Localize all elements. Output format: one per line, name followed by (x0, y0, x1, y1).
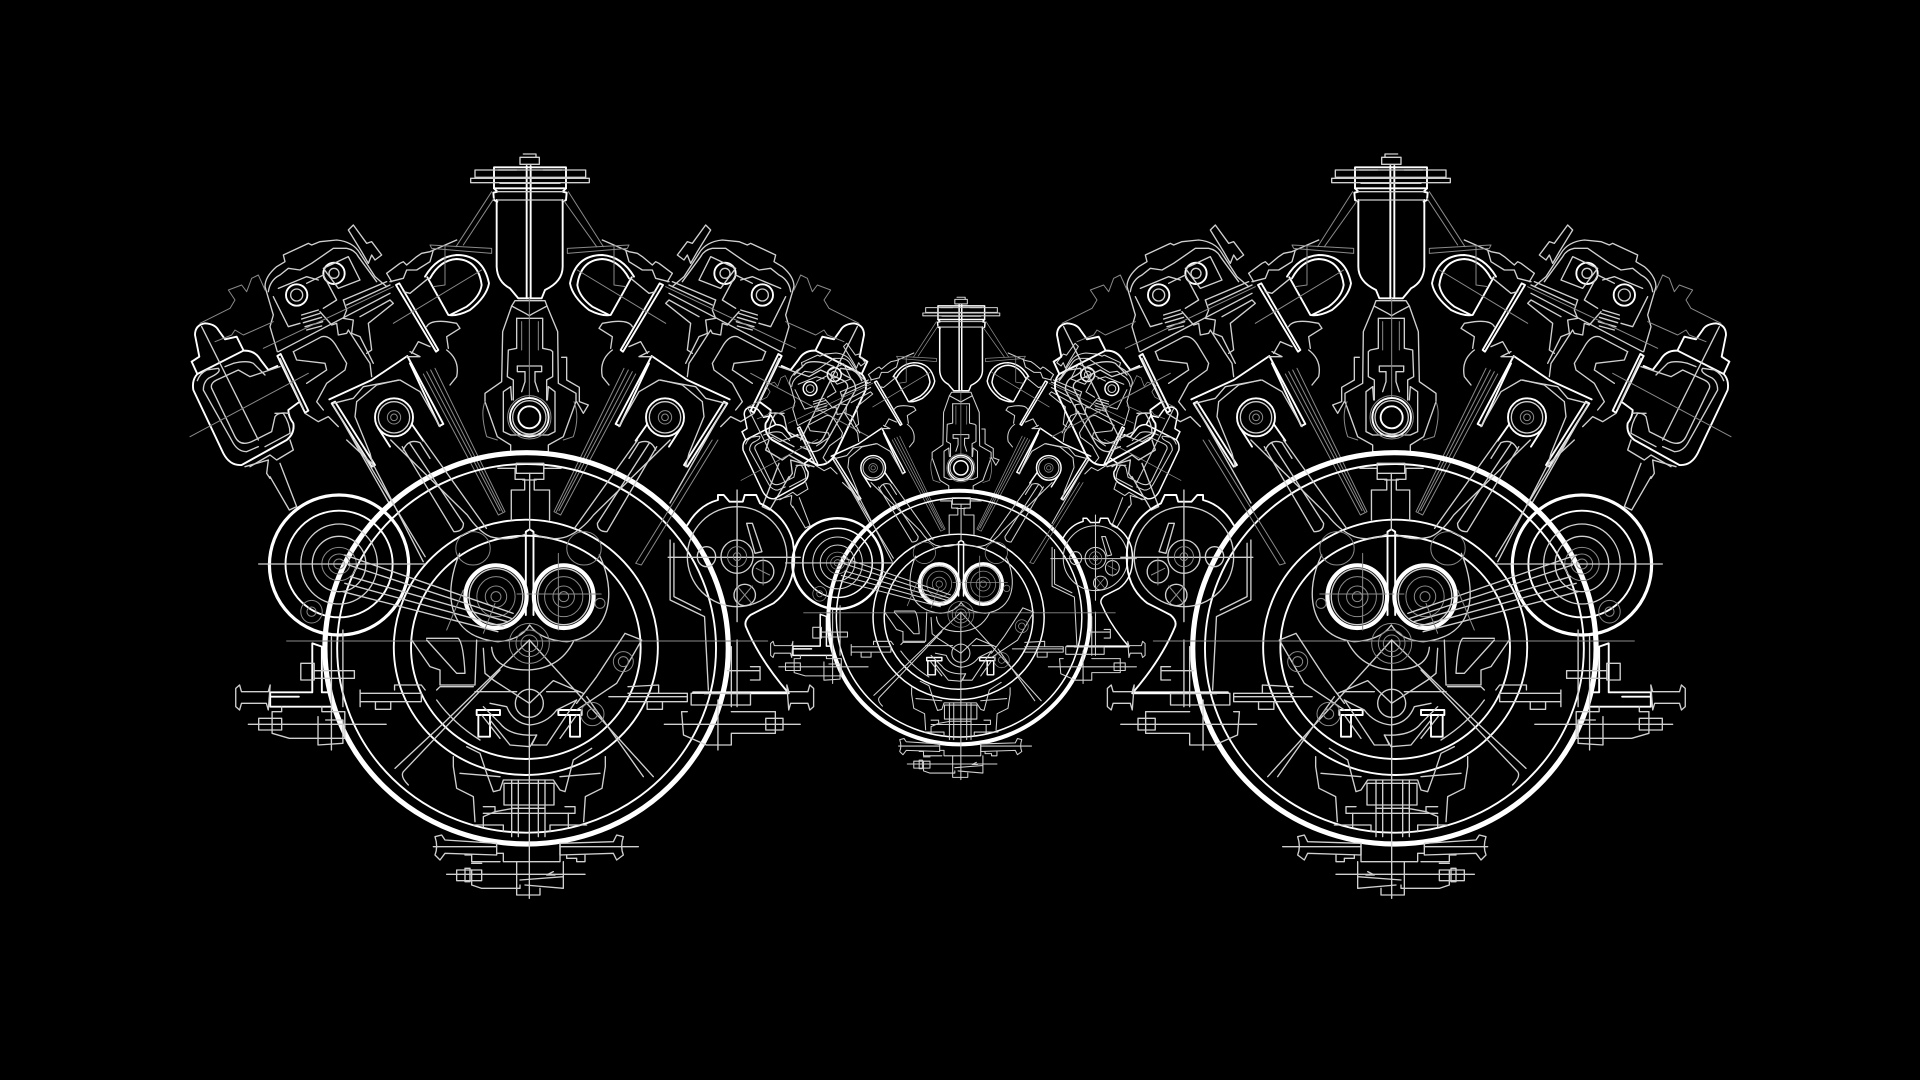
center engine (741, 297, 1181, 780)
main centre line across crank (287, 640, 768, 642)
crank interior, pedestal and bottom bolts (395, 590, 653, 898)
right engine (1052, 154, 1731, 898)
lower block: flywheel, crank, pulley, gears, mounts (236, 440, 814, 844)
lower pedestal (453, 747, 605, 837)
pulley (259, 495, 513, 635)
left engine (190, 154, 869, 898)
central column (456, 154, 603, 452)
crown details under the flywheel top (498, 463, 561, 530)
crank interior mechanism (412, 590, 642, 898)
timing gear housing (668, 490, 800, 693)
flywheel rings (325, 453, 728, 844)
side mounts left (236, 630, 425, 750)
upper block: cylinder banks and column (190, 154, 869, 515)
side mounts right (609, 640, 814, 750)
twin crank bores (347, 440, 718, 642)
bottom bolts (433, 835, 638, 895)
spokes (395, 640, 653, 785)
left cylinder bank (190, 225, 505, 515)
right cylinder bank (554, 225, 869, 515)
